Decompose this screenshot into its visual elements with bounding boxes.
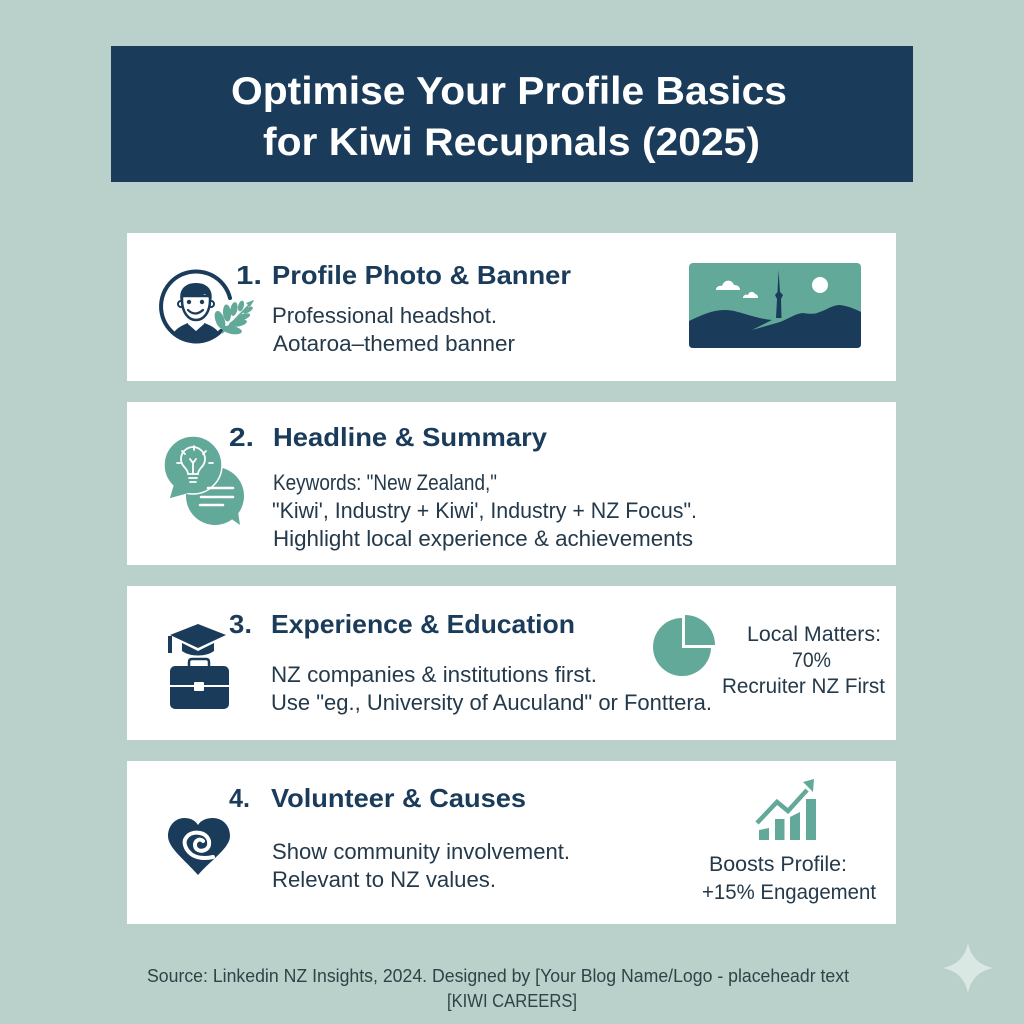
text: step 1 description bbox=[272, 303, 515, 356]
text: step 4 description: Relevant to NZ values. bbox=[272, 867, 496, 892]
chart: rising bars with arrow bbox=[757, 779, 816, 840]
callout: engagement statistic: +15% Engagement bbox=[702, 880, 876, 904]
panel: headline and summary bbox=[127, 402, 896, 565]
icon: profile avatar with fern bbox=[161, 271, 254, 343]
heading: step 3: 3. bbox=[229, 609, 252, 639]
callout: local matters statistic: Local Matters: bbox=[747, 622, 881, 646]
title banner: for Kiwi Recupnals (2025) bbox=[263, 121, 760, 164]
heading: step 4: 4. bbox=[229, 783, 250, 813]
chart: 70% pie bbox=[653, 615, 715, 676]
heading: step 3: Experience & Education bbox=[271, 609, 575, 639]
panel: experience and education bbox=[127, 586, 896, 740]
text: step 2 description bbox=[272, 470, 697, 551]
icon: graduation cap and briefcase bbox=[168, 624, 229, 709]
panel: profile photo and banner bbox=[127, 233, 896, 381]
panel: volunteer and causes bbox=[127, 761, 896, 924]
callout: local matters statistic: Recruiter NZ First bbox=[722, 674, 885, 698]
footer source text: [KIWI CAREERS] bbox=[447, 991, 577, 1011]
heading: step 2: Headline & Summary bbox=[273, 422, 548, 452]
callout: local matters statistic bbox=[722, 622, 885, 698]
text: step 2 description: "Kiwi', Industry + Kiwi', Industry + NZ Focus". bbox=[272, 498, 697, 523]
text: step 2 description: Keywords: "New Zealand," bbox=[273, 470, 497, 495]
text: step 3 description: NZ companies & institutions first. bbox=[271, 662, 597, 687]
icon: Aotearoa landscape banner with tower bbox=[689, 263, 861, 348]
callout: engagement statistic bbox=[702, 852, 876, 904]
text: step 1 description: Aotaroa–themed banner bbox=[273, 331, 515, 356]
title banner bbox=[111, 46, 913, 182]
footer source text bbox=[147, 966, 849, 1011]
heading: step 4: Volunteer & Causes bbox=[271, 783, 526, 813]
callout: local matters statistic: 70% bbox=[792, 648, 831, 672]
text: step 4 description: Show community involvement. bbox=[272, 839, 570, 864]
heading: step 1: Profile Photo & Banner bbox=[272, 260, 571, 290]
heading: step 2: 2. bbox=[229, 422, 254, 452]
text: step 2 description: Highlight local experience & achievements bbox=[273, 526, 693, 551]
text: step 4 description bbox=[272, 839, 570, 892]
heading: step 1: 1. bbox=[236, 260, 262, 290]
text: step 1 description: Professional headshot. bbox=[272, 303, 497, 328]
title banner: Optimise Your Profile Basics bbox=[231, 70, 787, 113]
icon: sparkle star bbox=[943, 943, 993, 993]
text: step 3 description bbox=[271, 662, 712, 715]
icon: heart with koru spiral bbox=[168, 818, 230, 875]
footer source text: Source: Linkedin NZ Insights, 2024. Designed by [Your Blog Name/Logo - placeheadr text bbox=[147, 966, 849, 986]
callout: engagement statistic: Boosts Profile: bbox=[709, 852, 847, 876]
text: step 3 description: Use "eg., University of Auculand" or Fonttera. bbox=[271, 690, 712, 715]
icon: speech bubbles with lightbulb bbox=[164, 436, 244, 525]
